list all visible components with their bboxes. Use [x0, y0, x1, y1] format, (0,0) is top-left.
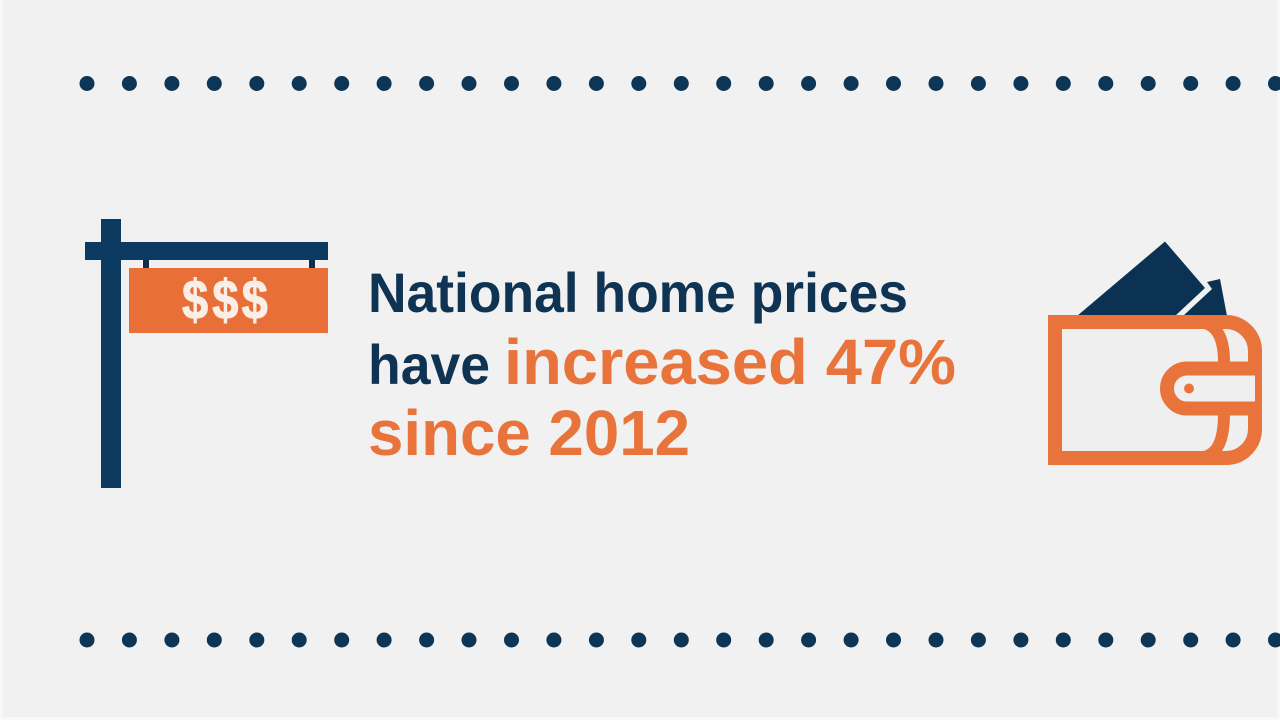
- icon: for-sale sign with $$$: $: [242, 268, 268, 331]
- headline text: have: [368, 333, 490, 396]
- headline text: since 2012: [368, 397, 690, 469]
- icon: for-sale sign with $$$: $: [212, 268, 239, 331]
- icon: wallet with bills: [1055, 242, 1255, 458]
- headline text: National home prices: [368, 261, 908, 324]
- icon: for-sale sign with $$$: $: [182, 268, 208, 331]
- headline text: increased 47%: [504, 326, 956, 398]
- icon: for-sale sign with $$$: [85, 219, 328, 488]
- headline text: [368, 261, 956, 469]
